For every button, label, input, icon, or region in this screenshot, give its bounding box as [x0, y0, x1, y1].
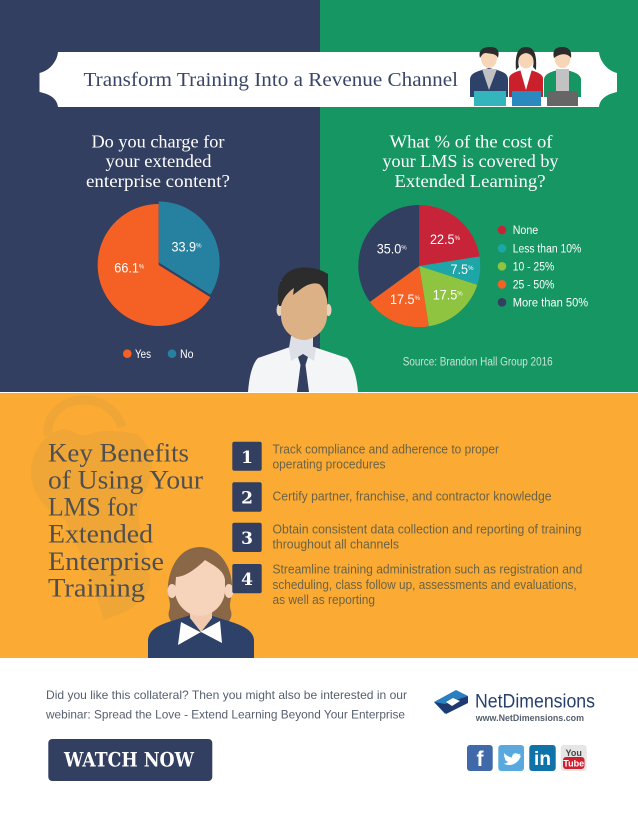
- benefit 1: Track compliance and adherence to proper: [272, 442, 499, 456]
- benefit 4: Streamline training administration such as registration and: [272, 562, 582, 576]
- label: 33.9%: 33.9: [172, 240, 198, 255]
- social icons: [467, 745, 587, 771]
- slice labels: 22.5: [430, 232, 456, 247]
- slice: yes 66.1%: [98, 204, 210, 326]
- pie chart: LMS cost covered: [358, 205, 480, 327]
- benefit 2: [232, 482, 552, 512]
- benefit 2: 2: [241, 488, 253, 508]
- legend: yes / no: Yes: [135, 349, 151, 361]
- slice labels: 17.5: [390, 292, 416, 307]
- button: watch now: WATCH NOW: [63, 748, 194, 772]
- benefit 4: as well as reporting: [272, 593, 375, 607]
- text: webinar invitation: webinar: Spread the Love - Extend Learning Beyond Your Enterprise: [45, 708, 405, 722]
- heading: key benefits: Enterprise: [48, 547, 164, 576]
- benefit 4: scheduling, class follow up, assessments and evaluations,: [272, 578, 577, 592]
- heading: key benefits: Extended: [48, 519, 153, 548]
- slice labels: 7.5: [450, 262, 469, 277]
- slice labels: %: [457, 290, 463, 297]
- illustration: woman in navy top: [148, 547, 254, 658]
- text: webinar invitation: Did you like this collateral? Then you might also be interested in our: [46, 688, 407, 702]
- slice labels: 35.0: [377, 241, 403, 256]
- heading: left question: [86, 132, 230, 191]
- label: 33.9%: %: [196, 243, 202, 250]
- illustration: man in white shirt: [248, 267, 358, 392]
- logo: NetDimensions: NetDimensions: [475, 692, 595, 713]
- heading: right question: Extended Learning?: [394, 171, 546, 191]
- icon: linkedin: in: [534, 749, 551, 770]
- benefits list: [232, 442, 582, 607]
- icon: three people with laptops: [470, 47, 581, 106]
- label: 66.1%: %: [139, 263, 145, 270]
- heading: key benefits: Training: [48, 574, 145, 603]
- icon: logo mark: [434, 690, 468, 714]
- heading: left question: enterprise content?: [86, 171, 230, 191]
- benefit 1: operating procedures: [272, 457, 386, 471]
- label: 66.1%: 66.1: [114, 260, 141, 275]
- icon: twitter: [498, 745, 524, 771]
- panel: right green background: [320, 0, 638, 392]
- icon: facebook: f: [476, 748, 484, 771]
- panel: white footer background: [0, 658, 638, 826]
- benefit 3: [232, 522, 582, 552]
- benefit 4: 4: [241, 570, 253, 590]
- legend: LMS cost ranges: None: [513, 225, 538, 237]
- benefit 3: throughout all channels: [272, 538, 399, 552]
- slice: 10-25%: [419, 266, 477, 326]
- legend: LMS cost ranges: Less than 10%: [513, 243, 581, 255]
- logo: NetDimensions: [434, 690, 595, 724]
- benefit 2: Certify partner, franchise, and contractor knowledge: [272, 490, 552, 504]
- heading: left question: your extended: [106, 151, 212, 171]
- benefit 4: [232, 562, 582, 607]
- benefit 1: 1: [241, 448, 253, 468]
- legend: LMS cost ranges: 10 - 25%: [513, 261, 554, 273]
- slice: more than 50%: [358, 205, 419, 302]
- heading: right question: What % of the cost of: [390, 132, 553, 152]
- slice labels: %: [468, 265, 474, 272]
- slice labels: %: [455, 235, 460, 242]
- pie chart: charge for content: [98, 202, 220, 326]
- legend: yes / no: [123, 349, 194, 361]
- title banner: [40, 47, 617, 107]
- slice labels: 17.5: [433, 287, 459, 302]
- benefit 3: 3: [241, 529, 253, 549]
- button: watch now: [48, 739, 212, 781]
- slice labels: %: [415, 295, 420, 302]
- text: webinar invitation: [45, 688, 407, 722]
- heading: key benefits: LMS for: [48, 493, 137, 522]
- heading: left question: Do you charge for: [92, 132, 225, 152]
- slice: no 33.9%: [159, 202, 220, 295]
- heading: right question: [382, 132, 559, 191]
- benefit 1: [232, 442, 499, 471]
- heading: key benefits: of Using Your: [48, 466, 203, 494]
- heading: key benefits: Key Benefits: [48, 439, 189, 468]
- heading: right question: your LMS is covered by: [382, 151, 559, 171]
- legend: LMS cost ranges: [498, 225, 588, 309]
- logo: NetDimensions: www.NetDimensions.com: [475, 713, 584, 724]
- benefit 3: Obtain consistent data collection and reporting of training: [272, 522, 582, 536]
- icon: youtube: [561, 745, 587, 771]
- heading: key benefits: [48, 439, 203, 603]
- legend: yes / no: No: [180, 349, 194, 361]
- panel: left navy background: [0, 0, 320, 392]
- slice: less than 10%: [419, 256, 480, 285]
- slice: 25-50%: [370, 266, 429, 327]
- icon: youtube: You: [566, 748, 582, 758]
- title: Transform Training Into a Revenue Channel: [84, 69, 458, 91]
- legend: LMS cost ranges: More than 50%: [513, 297, 588, 309]
- panel: orange benefits background: [0, 393, 638, 658]
- slice labels: [377, 232, 474, 307]
- slice: none: [419, 205, 480, 266]
- legend: LMS cost ranges: 25 - 50%: [513, 279, 554, 291]
- source note: Source: Brandon Hall Group 2016: [403, 357, 553, 369]
- watermark: keys: [31, 400, 152, 620]
- icon: youtube: Tube: [563, 758, 584, 768]
- slice labels: %: [401, 244, 407, 251]
